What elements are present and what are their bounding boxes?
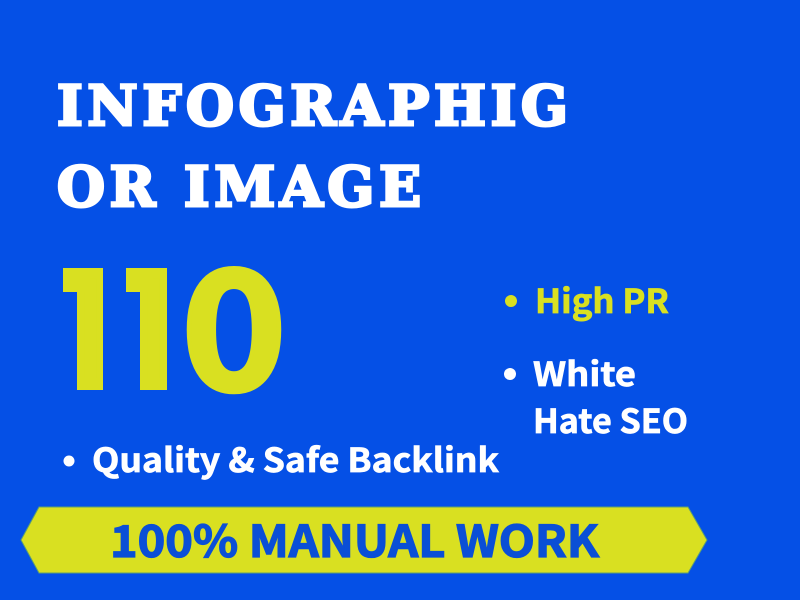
title: OR IMAGE <box>57 154 421 219</box>
big number 110: 1 <box>38 199 136 440</box>
banner: 100% MANUAL WORK <box>110 506 600 570</box>
banner <box>21 506 707 573</box>
big number 110 <box>63 266 282 394</box>
list item: White Hate SEO: White <box>533 348 636 396</box>
list item: Quality and Safe Backlink: Quality & Safe Backlink <box>92 434 499 482</box>
title: INFOGRAPHIG <box>57 73 568 138</box>
title <box>57 73 568 219</box>
list item: White Hate SEO: Hate SEO <box>533 395 688 443</box>
list item: High PR: High PR <box>535 275 669 323</box>
list item: White Hate SEO <box>504 348 688 443</box>
big number 110: 0 <box>181 197 287 438</box>
big number 110: 1 <box>101 199 199 440</box>
